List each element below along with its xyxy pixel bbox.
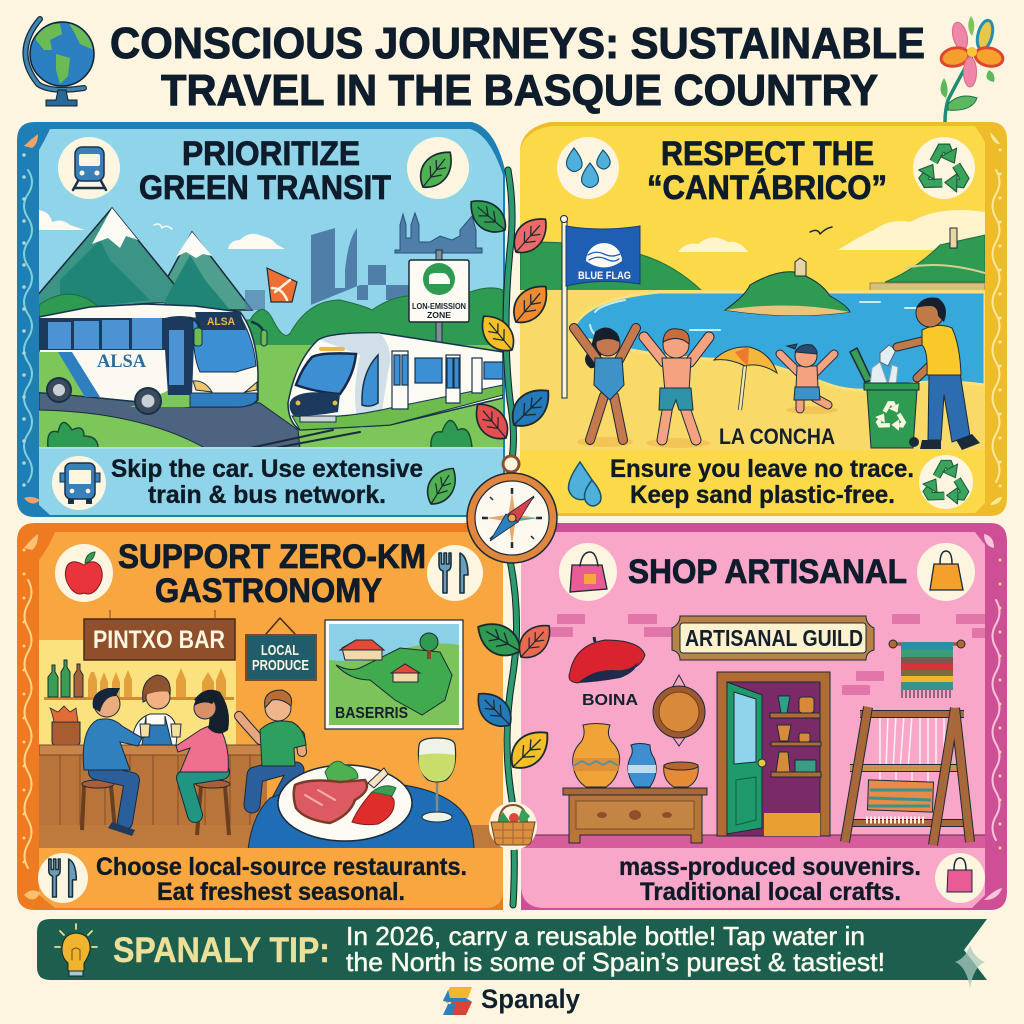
woman at bar — [176, 690, 230, 835]
icon: water drops — [557, 137, 619, 199]
basket of produce — [50, 706, 80, 745]
icon: water drop — [568, 462, 601, 506]
icon: cutlery — [427, 545, 483, 601]
icon: train — [58, 137, 120, 199]
illustration: artisan shop — [521, 614, 986, 850]
flag — [267, 268, 297, 302]
tapestry — [889, 640, 965, 698]
label: la concha: LA CONCHA — [719, 424, 835, 449]
beret — [569, 637, 645, 683]
logo: spanaly — [443, 984, 580, 1015]
wine glass — [418, 738, 456, 822]
icon: bus — [52, 456, 106, 510]
bus: ALSA — [207, 316, 235, 328]
heading: spanaly tip: SPANALY TIP: — [113, 931, 330, 970]
title: TRAVEL IN THE BASQUE COUNTRY — [161, 66, 878, 115]
caption: mass-produced souvenirs — [619, 853, 921, 906]
recycling bin — [850, 345, 919, 448]
floor — [39, 825, 503, 850]
heading: shop artisanal: SHOP ARTISANAL — [628, 553, 907, 591]
sign: low-emission zone: ZONE — [427, 311, 452, 320]
sign: local produce: PRODUCE — [252, 657, 309, 674]
sign: artisanal guild — [672, 616, 874, 660]
icon: recycle — [913, 137, 975, 199]
heading: respect the cantabrico: “CANTÁBRICO” — [647, 167, 887, 207]
sign: artisanal guild: ARTISANAL GUILD — [685, 625, 863, 651]
mountains — [25, 208, 252, 310]
loom — [845, 707, 970, 845]
sign: pintxo bar — [84, 610, 235, 660]
icon: apple — [55, 544, 113, 602]
illustration: beach scene — [520, 210, 985, 450]
caption: choose local — [96, 853, 467, 906]
icon: pink shopping bag — [559, 543, 617, 601]
caption: skip the car: Skip the car. Use extensive — [111, 455, 423, 483]
clouds — [678, 210, 985, 252]
caption: skip the car — [111, 455, 423, 509]
heading: prioritize green transit — [139, 135, 391, 207]
bar counter — [39, 745, 267, 825]
blue flag: BLUE FLAG — [578, 270, 631, 282]
icon: light bulb — [55, 924, 97, 976]
heading: respect the cantabrico — [647, 135, 887, 207]
map: baserris — [325, 620, 463, 729]
girl — [574, 327, 636, 447]
doorway — [717, 672, 830, 836]
child kneeling — [780, 344, 838, 414]
parasol — [714, 347, 777, 410]
icon: globe — [25, 19, 94, 106]
heading: prioritize green transit: GREEN TRANSIT — [139, 169, 391, 207]
panel: shop artisanal — [521, 523, 1007, 910]
pottery — [573, 724, 698, 787]
icon: pink bag small — [935, 853, 985, 903]
icon: leaf — [407, 137, 469, 199]
caption: leave no trace: Keep sand plastic-free. — [630, 481, 895, 509]
logo: spanaly: Spanaly — [481, 984, 580, 1014]
title — [110, 19, 925, 115]
table with steak and pepper — [248, 761, 474, 850]
tip banner — [37, 919, 987, 988]
bus — [39, 303, 267, 414]
heading: respect the cantabrico: RESPECT THE — [661, 135, 874, 173]
sign: low-emission zone: LON-EMISSION — [412, 302, 466, 311]
panel: respect the cantabrico — [520, 122, 1007, 516]
man recycling — [897, 297, 980, 450]
sea — [575, 292, 985, 390]
bricks — [545, 614, 986, 695]
bartender — [132, 675, 177, 745]
label: boina: BOINA — [582, 692, 638, 709]
caption: choose local: Choose local-source restaurants. — [96, 853, 467, 881]
sand — [520, 290, 985, 450]
man standing at bar — [239, 690, 306, 805]
sign: pintxo bar: PINTXO BAR — [93, 626, 225, 654]
bus: ALSA — [97, 351, 146, 372]
heading: support zero-km gastronomy — [118, 538, 426, 610]
title: CONSCIOUS JOURNEYS: SUSTAINABLE — [110, 19, 925, 68]
caption: mass-produced souvenirs: mass-produced souvenirs. — [619, 853, 921, 881]
icon: leaf small — [420, 462, 463, 510]
tip text: In 2026, carry a reusable bottle! Tap water in — [346, 921, 865, 951]
caption: mass-produced souvenirs: Traditional local crafts. — [640, 878, 901, 906]
hills — [39, 287, 503, 345]
heading: prioritize green transit: PRIORITIZE — [182, 135, 360, 173]
icon: flower — [939, 16, 1005, 122]
train — [288, 333, 503, 430]
skyline — [245, 213, 482, 310]
grass — [39, 345, 503, 448]
icon: cutlery small — [38, 853, 88, 903]
vine with leaves — [463, 170, 558, 905]
wall plate — [653, 675, 705, 746]
island — [725, 258, 850, 316]
bar back wall — [39, 640, 236, 750]
illustration: pintxo bar scene — [39, 610, 503, 850]
caption: skip the car: train & bus network. — [148, 481, 386, 509]
map: baserris: BASERRIS — [335, 705, 408, 722]
boy — [644, 329, 710, 448]
tip text: the North is some of Spain’s purest & tastiest! — [346, 947, 885, 977]
hills — [520, 235, 985, 292]
wooden table — [563, 788, 707, 843]
tip text — [346, 921, 885, 977]
heading: support zero-km gastronomy: GASTRONOMY — [155, 572, 382, 610]
heading: support zero-km gastronomy: SUPPORT ZERO-KM — [118, 538, 426, 576]
shrubs — [48, 420, 472, 448]
sign: low-emission zone — [409, 250, 469, 350]
sign: local produce — [246, 618, 316, 680]
panel: zero-km gastronomy — [17, 523, 503, 910]
glasses — [140, 724, 181, 737]
floor — [521, 835, 985, 850]
icon: orange shopping bag — [917, 543, 975, 601]
caption: choose local: Eat freshest seasonal. — [157, 878, 405, 906]
panel: green transit — [17, 122, 505, 517]
caption: leave no trace: Ensure you leave no trace. — [610, 455, 914, 483]
icon: recycle small — [919, 455, 973, 509]
icon: compass — [467, 456, 557, 563]
clouds — [39, 210, 285, 249]
icon: produce basket — [489, 802, 537, 850]
man at bar — [82, 688, 142, 836]
illustration: transit scene — [25, 208, 503, 448]
blue flag — [560, 216, 640, 398]
shelf of bottles — [44, 660, 234, 700]
sign: local produce: LOCAL — [261, 642, 299, 659]
caption: leave no trace — [610, 455, 914, 509]
